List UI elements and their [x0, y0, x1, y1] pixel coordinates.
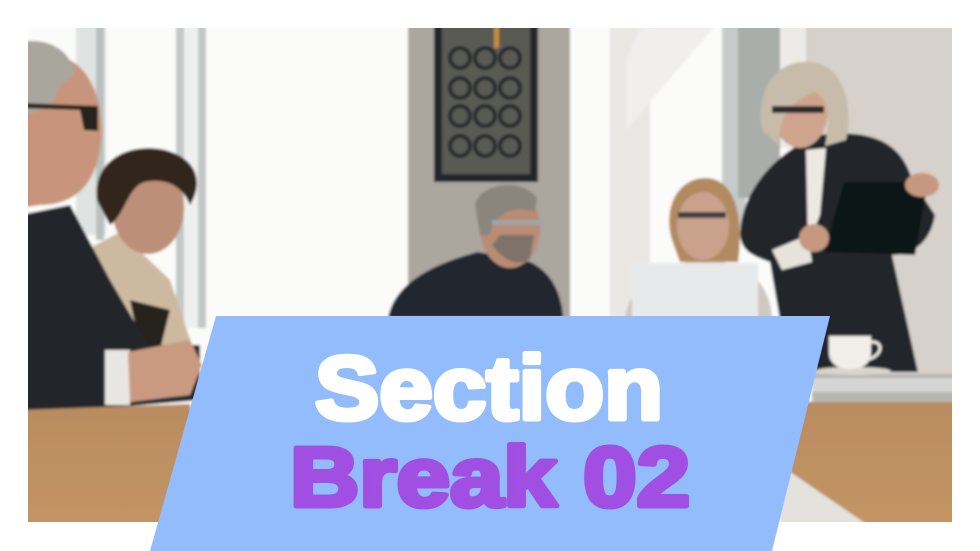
person: seated man centre: [388, 185, 563, 318]
person: woman far left: [86, 148, 197, 350]
person: man left foreground: [20, 41, 202, 412]
heading: Section: Section: [315, 339, 663, 439]
wall art panel: [434, 20, 538, 182]
person: standing woman with folder: [740, 62, 939, 372]
heading: Break 02: Break 02: [290, 430, 690, 524]
table: [20, 374, 960, 530]
person: seated woman with laptop: [625, 178, 772, 318]
room background: [28, 28, 952, 410]
banner: blue parallelogram: [150, 316, 830, 551]
coffee cup and saucer: [815, 336, 891, 375]
